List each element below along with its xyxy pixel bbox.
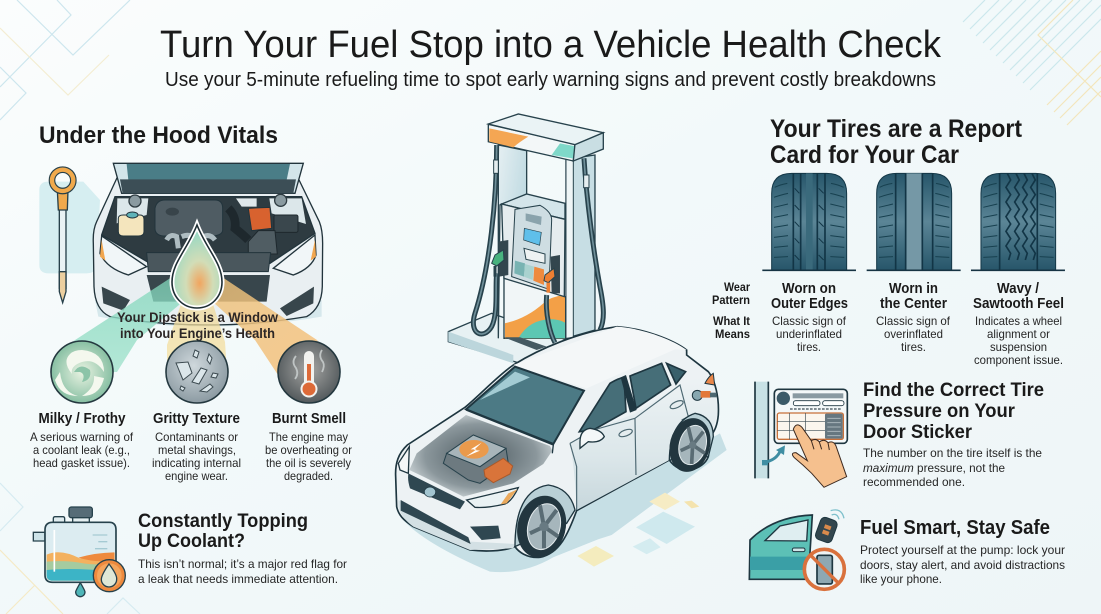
text: door sticker description: The number on the tire itself is the — [863, 446, 1042, 460]
windshield — [466, 367, 584, 444]
column: burnt: degraded. — [284, 469, 333, 483]
mirror — [580, 428, 604, 448]
callout: dipstick: into Your Engine’s Health — [120, 326, 275, 341]
icon: dipstick — [39, 170, 100, 303]
column: milky: A serious warning of — [30, 430, 134, 444]
row labels: What It — [713, 314, 750, 328]
ground tiles — [577, 493, 699, 567]
text: fuel smart description: like your phone. — [860, 572, 942, 586]
text: door sticker description: recommended one. — [863, 475, 965, 489]
illustration: engine bay — [93, 163, 323, 327]
subtitle: Use your 5-minute refueling time to spot early warning signs and prevent costly breakdowns — [165, 69, 936, 91]
icon: thermometer — [278, 341, 340, 403]
side windows — [579, 363, 686, 432]
heading: coolant — [138, 510, 308, 552]
column: sawtooth — [973, 280, 1064, 367]
column: sawtooth: Sawtooth Feel — [973, 295, 1064, 312]
column: burnt: Burnt Smell — [272, 410, 346, 427]
door lines and handles — [570, 385, 688, 510]
front wheel — [510, 485, 575, 563]
heading: door sticker: Find the Correct Tire — [863, 379, 1044, 401]
heading: door sticker: Door Sticker — [863, 421, 972, 443]
fog light — [470, 526, 501, 540]
column: gritty — [152, 410, 241, 483]
panel: door sticker — [755, 379, 1044, 489]
icon: milky swirl — [51, 341, 113, 403]
car shadow — [402, 433, 727, 572]
column: burnt — [265, 410, 352, 483]
headlight — [467, 488, 518, 508]
column: sawtooth: Indicates a wheel — [975, 314, 1062, 328]
column: sawtooth: component issue. — [974, 353, 1063, 367]
text: fuel smart description: doors, stay alert, and avoid distractions — [860, 558, 1065, 572]
tire: outer wear — [762, 173, 856, 270]
panel: tires — [712, 115, 1065, 367]
hood cutaway — [398, 410, 553, 497]
text: door sticker description: maximum pressure, not the — [863, 461, 1005, 475]
icon: gritty metal — [166, 341, 228, 403]
column: gritty: Contaminants or — [155, 430, 238, 444]
column: gritty: engine wear. — [165, 469, 228, 483]
tire: center wear — [867, 173, 961, 270]
column: center: overinflated — [884, 327, 943, 341]
column: sawtooth: suspension — [990, 340, 1047, 354]
icon: oil drop — [172, 225, 222, 308]
heading: door sticker — [863, 379, 1044, 443]
panel: coolant — [33, 507, 347, 597]
illustration: car — [396, 327, 727, 572]
column: sawtooth: Wavy / — [997, 280, 1040, 297]
tire: sawtooth — [971, 173, 1065, 270]
column: outer edges — [771, 280, 848, 354]
heading: coolant: Up Coolant? — [138, 530, 245, 552]
column: outer edges: Outer Edges — [771, 295, 848, 312]
roof line — [513, 327, 687, 388]
heading: tires: Card for Your Car — [770, 141, 959, 169]
heading: tires — [770, 115, 1023, 169]
panel: under the hood vitals — [30, 122, 352, 483]
heading: coolant: Constantly Topping — [138, 510, 308, 532]
column: burnt: the oil is severely — [266, 456, 351, 470]
callout: dipstick — [117, 310, 278, 341]
row labels: Pattern — [712, 293, 750, 307]
column: center: the Center — [880, 295, 947, 312]
rear wheel — [664, 413, 716, 477]
text: coolant description — [138, 557, 347, 586]
column: center: Classic sign of — [876, 314, 951, 328]
column: milky: a coolant leak (e.g., — [33, 443, 130, 457]
column: center — [876, 280, 951, 354]
car side panel — [570, 373, 717, 510]
beam: milky — [52, 277, 185, 372]
heading: under the hood: Under the Hood Vitals — [39, 122, 278, 149]
text: coolant description: a leak that needs immediate attention. — [138, 572, 338, 586]
column: center: tires. — [901, 340, 926, 354]
badge — [424, 487, 436, 497]
column: milky: Milky / Frothy — [38, 410, 126, 427]
battery module — [443, 435, 513, 483]
heading: fuel smart: Fuel Smart, Stay Safe — [860, 517, 1050, 539]
icon: oil drop outline — [172, 225, 222, 308]
column: sawtooth: alignment or — [987, 327, 1050, 341]
text: fuel smart description — [860, 543, 1065, 586]
text: fuel smart description: Protect yourself at the pump: lock your — [860, 543, 1065, 557]
title: Turn Your Fuel Stop into a Vehicle Health Check — [160, 24, 942, 66]
column: outer edges: tires. — [797, 340, 821, 354]
illustration: fuel pump — [448, 114, 603, 363]
column: outer edges: underinflated — [776, 327, 842, 341]
column: gritty: indicating internal — [152, 456, 241, 470]
panel: fuel smart — [749, 510, 1065, 589]
callout: dipstick: Your Dipstick is a Window — [117, 310, 278, 325]
beam: burnt — [213, 277, 340, 378]
tail light and fuel door — [692, 373, 717, 400]
lower grille — [401, 500, 471, 544]
row labels: Wear — [724, 280, 750, 294]
column: gritty: metal shavings, — [158, 443, 236, 457]
icon: car door, key fob, no phone — [749, 510, 844, 589]
text: door sticker description — [863, 446, 1042, 489]
column: center: Worn in — [889, 280, 938, 297]
heading: tires: Your Tires are a Report — [770, 115, 1023, 143]
row labels: Means — [715, 327, 750, 341]
column: outer edges: Classic sign of — [772, 314, 847, 328]
column: milky: head gasket issue). — [33, 456, 130, 470]
row labels — [712, 280, 750, 341]
front bumper shade — [398, 500, 515, 550]
column: burnt: The engine may — [269, 430, 348, 444]
column: outer edges: Worn on — [782, 280, 836, 297]
car body — [396, 327, 718, 557]
icon: coolant tank — [33, 507, 125, 597]
text: coolant description: This isn’t normal; it’s a major red flag for — [138, 557, 347, 571]
heading: door sticker: Pressure on Your — [863, 400, 1015, 422]
grille — [408, 473, 465, 509]
column: burnt: be overheating or — [265, 443, 352, 457]
column: milky — [30, 410, 134, 470]
icon: door sticker and hand — [755, 382, 847, 487]
column: gritty: Gritty Texture — [153, 410, 240, 427]
beam: gritty — [167, 304, 227, 372]
